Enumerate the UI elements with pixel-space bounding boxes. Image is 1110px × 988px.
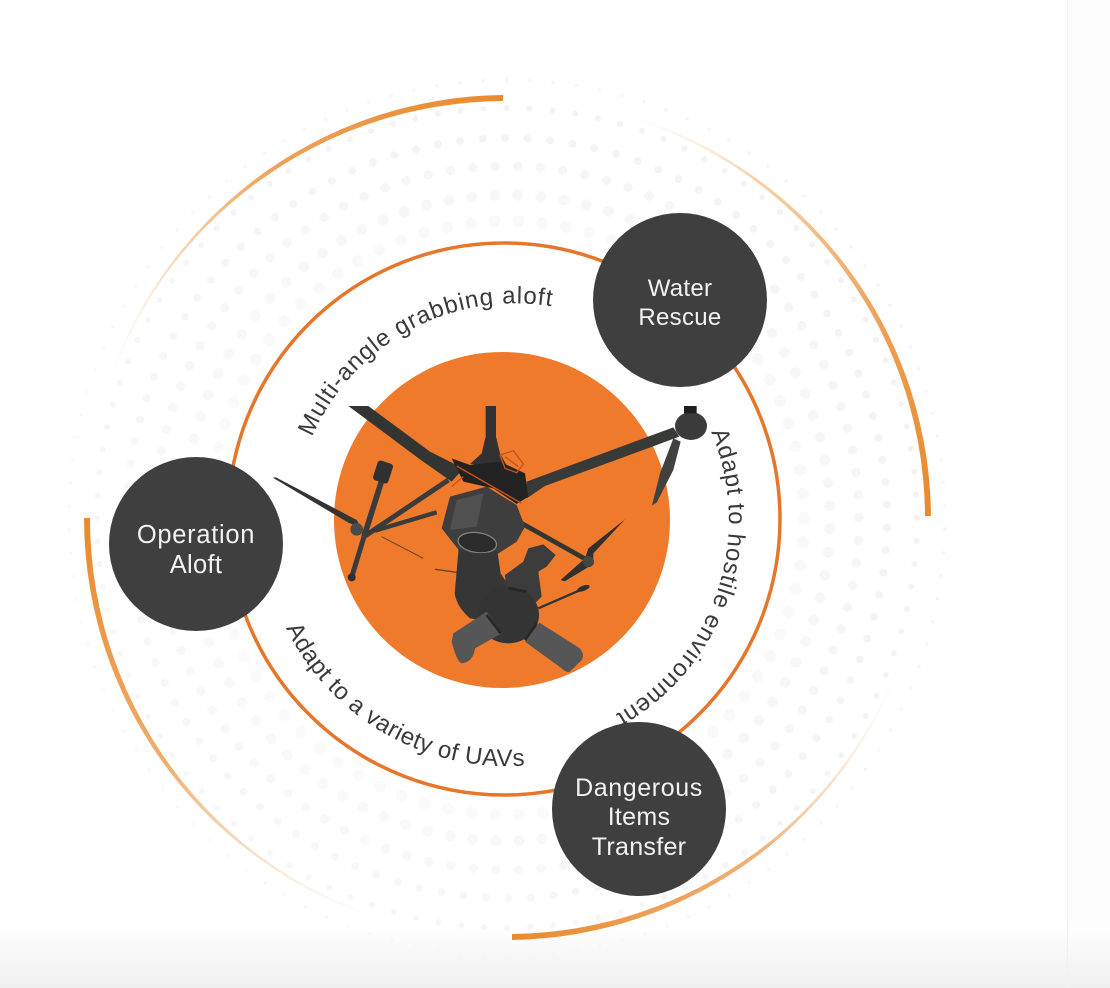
node: dangerous items transfer — [552, 722, 726, 896]
drone landing frame: left — [348, 460, 448, 581]
node: water rescue: Water — [648, 275, 712, 302]
gripper claw: lower left — [452, 612, 502, 663]
drone top stem — [470, 406, 508, 468]
curved label: multi-angle grabbing aloft: Multi-angle grabbing aloft — [298, 286, 553, 436]
drone illustration — [273, 406, 707, 672]
node: operation aloft — [109, 457, 283, 631]
orange centre disc — [334, 352, 670, 688]
gimbal tube — [455, 548, 513, 623]
outer arc: bottom right — [512, 648, 905, 940]
gripper claw: lower right — [525, 623, 583, 672]
node: water rescue — [593, 213, 767, 387]
inner orange ring — [228, 243, 780, 795]
node: operation aloft: Operation — [137, 521, 255, 549]
orange wire detail — [452, 451, 523, 503]
drone arm: upper left with blade — [348, 406, 463, 482]
drone propeller: left — [273, 477, 457, 572]
drone arm: right with motor and blade — [527, 406, 707, 505]
drone arm: lower right with propeller — [522, 519, 625, 608]
outer arc: top left — [105, 95, 503, 395]
outer arc: top right — [560, 102, 931, 516]
dotted halftone ring pattern — [94, 78, 946, 928]
outer arc: bottom left — [84, 518, 420, 929]
gripper hub — [478, 587, 539, 643]
drone central body — [452, 458, 528, 504]
node: dangerous items transfer: Transfer — [592, 833, 686, 861]
node: water rescue: Rescue — [638, 304, 722, 331]
node: operation aloft: Aloft — [170, 551, 222, 579]
node: dangerous items transfer: Items — [608, 803, 670, 831]
gimbal ring — [457, 530, 498, 555]
gripper upper block — [505, 544, 556, 612]
curved label: adapt to a variety of UAVs: Adapt to a variety of UAVs — [286, 626, 524, 766]
node: dangerous items transfer: Dangerous — [575, 774, 703, 802]
curved label: adapt to hostile environment: Adapt to hostile environment — [616, 432, 746, 724]
gimbal sphere lit facet — [450, 493, 483, 530]
gripper straps — [487, 588, 537, 640]
drone gimbal sphere — [442, 487, 525, 557]
